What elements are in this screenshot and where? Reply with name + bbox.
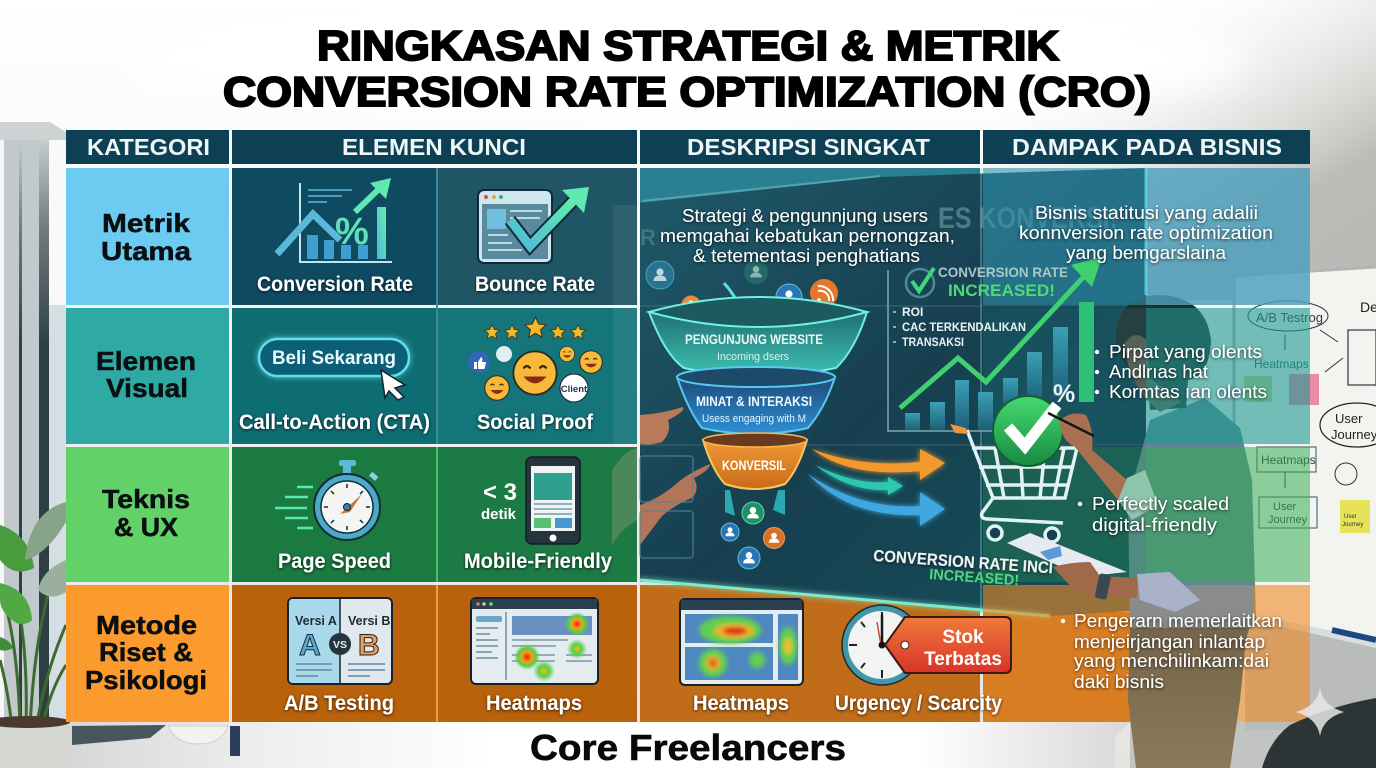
impact text row 3: digital-friendly bbox=[1092, 515, 1217, 535]
table header row: ELEMEN KUNCI bbox=[342, 134, 526, 160]
table header row: KATEGORI bbox=[87, 134, 210, 160]
funnel visitors icons bbox=[646, 260, 838, 316]
label: bounce rate: Bounce Rate bbox=[475, 273, 595, 296]
impact text row 2: Kormtas ıan olents bbox=[1109, 382, 1267, 402]
impact text row 4: daki bisnis bbox=[1074, 672, 1164, 692]
label: heatmaps second: Heatmaps bbox=[693, 692, 789, 715]
funnel: stage 2: Usess engaging with M bbox=[702, 413, 806, 425]
label: social proof: Social Proof bbox=[477, 411, 594, 434]
row tints over impact column bbox=[983, 168, 1310, 722]
impact text row 4 bbox=[1061, 611, 1282, 692]
funnel: stage 2 bbox=[677, 367, 835, 434]
impact text row 4: menjeirjangan inlantap bbox=[1074, 632, 1265, 652]
footer brand: Core Freelancers bbox=[530, 727, 846, 768]
presenter lower body bbox=[1128, 585, 1254, 768]
whiteboard bbox=[1232, 267, 1376, 648]
whiteboard: User bbox=[1344, 514, 1357, 520]
presenter upper body bbox=[1116, 295, 1256, 625]
whiteboard: A/B Testrog bbox=[1256, 310, 1323, 325]
title: RINGKASAN STRATEGI & METRIK bbox=[317, 22, 1059, 69]
flow arrows bbox=[808, 449, 945, 526]
whiteboard: User bbox=[1273, 501, 1297, 513]
holographic screen: R bbox=[640, 225, 656, 250]
whiteboard: Journey bbox=[1268, 514, 1308, 526]
impact text row 4: yang menchilinkam:dai bbox=[1074, 651, 1269, 671]
impact text row 4: Pengerarn memerlaitkan bbox=[1074, 611, 1282, 631]
pointing hands bbox=[640, 407, 710, 558]
chart panel: CAC TERKENDALIKAN bbox=[902, 320, 1026, 334]
holographic screen: ES KONVERSI! bbox=[938, 202, 1118, 235]
white glow behind title bbox=[128, 0, 1248, 120]
conversion rate text on screen: INCREASED! bbox=[929, 566, 1020, 589]
icon: A/B test: Versi A bbox=[295, 614, 337, 628]
title: CONVERSION RATE OPTIMIZATION (CRO) bbox=[223, 68, 1151, 115]
icon: A/B test: VS bbox=[333, 639, 347, 651]
chair bbox=[1262, 698, 1376, 768]
icon: A/B test: B bbox=[358, 629, 380, 662]
description text: & tetementasi penghatians bbox=[693, 246, 920, 266]
table header row: DESKRIPSI SINGKAT bbox=[687, 134, 930, 160]
desk objects bbox=[72, 725, 240, 756]
icon: conversion rate bbox=[277, 178, 392, 262]
impact text row 1: yang bemgarslaina bbox=[1066, 243, 1227, 263]
funnel: stage 2: MINAT & INTERAKSI bbox=[696, 394, 812, 409]
key element cells bbox=[232, 168, 637, 722]
impact text row 2: Pirpat yang olents bbox=[1109, 342, 1262, 362]
category cells: Utama bbox=[101, 236, 192, 266]
plant and pot bbox=[0, 502, 70, 768]
impact text row 3 bbox=[1078, 494, 1229, 535]
funnel: stage 1 bbox=[649, 297, 867, 376]
icon: social proof: Client bbox=[561, 384, 588, 395]
description text bbox=[660, 206, 955, 266]
icon: phone with load time bbox=[481, 457, 580, 544]
label: mobile friendly: Mobile-Friendly bbox=[464, 550, 612, 573]
chart panel: CONVERSION RATE bbox=[938, 264, 1068, 280]
icon: clock with stock tag bbox=[842, 605, 1011, 685]
category cells: Visual bbox=[106, 373, 188, 403]
chart panel: TRANSAKSI bbox=[902, 335, 964, 349]
whiteboard: Heatmaps bbox=[1261, 453, 1316, 467]
holographic screen bbox=[640, 168, 1146, 616]
label: page speed: Page Speed bbox=[278, 550, 391, 573]
watermark sparkle bbox=[1296, 688, 1344, 736]
category cells: & UX bbox=[114, 512, 179, 542]
chart panel bbox=[888, 257, 1102, 431]
category cells bbox=[66, 168, 229, 722]
icon: CTA button bbox=[259, 339, 409, 400]
impact text row 2 bbox=[1095, 342, 1267, 402]
whiteboard: Journey bbox=[1342, 522, 1363, 528]
funnel: stage 1: PENGUNJUNG WEBSITE bbox=[685, 331, 823, 347]
table header row: DAMPAK PADA BISNIS bbox=[1012, 134, 1282, 160]
icon: social proof bbox=[468, 317, 602, 402]
icon: stopwatch bbox=[275, 460, 380, 540]
table header row bbox=[66, 130, 1310, 164]
description text: memgahai kebatukan pernongzan, bbox=[660, 226, 955, 246]
conversion rate text on screen: CONVERSION RATE INCI bbox=[873, 546, 1054, 578]
category cells: Elemen bbox=[96, 346, 196, 376]
whiteboard: User bbox=[1335, 411, 1363, 426]
shopping cart with check badge: % bbox=[1053, 380, 1075, 408]
category cells: Metrik bbox=[102, 208, 191, 238]
presenter arms, pen and tablet bbox=[1007, 413, 1200, 612]
icon: A/B test: Versi B bbox=[348, 614, 390, 628]
icon: heatmap page bbox=[471, 598, 598, 684]
icon: A/B test: A bbox=[299, 629, 321, 662]
whiteboard: Journey bbox=[1331, 427, 1376, 442]
funnel: stage 3 conversion: KONVERSIL bbox=[722, 457, 786, 473]
label: CTA: Call-to-Action (CTA) bbox=[239, 411, 430, 434]
icon: phone with load time: detik bbox=[481, 506, 517, 523]
label: conversion rate: Conversion Rate bbox=[257, 273, 413, 296]
icon: phone with load time: < 3 bbox=[483, 479, 517, 506]
funnel: stage 3 conversion bbox=[703, 433, 807, 516]
funnel: stage 1: Incoming dsers bbox=[717, 351, 789, 363]
icon: heatmap screen bbox=[680, 599, 803, 685]
shopping cart with check badge bbox=[950, 380, 1077, 542]
label: urgency: Urgency / Scarcity bbox=[835, 692, 1002, 715]
converted users bbox=[721, 502, 784, 569]
category cells: Teknis bbox=[102, 484, 190, 514]
description column cells bbox=[640, 168, 980, 722]
icon: clock with stock tag: Stok bbox=[942, 627, 984, 648]
icon: A/B test bbox=[288, 598, 392, 684]
icon: clock with stock tag: Terbatas bbox=[924, 649, 1002, 670]
impact text row 1: Bisnis statitusi yang adalii bbox=[1035, 203, 1258, 223]
impact text row 3: Perfectly scaled bbox=[1092, 494, 1229, 514]
category cells: Metode bbox=[96, 610, 197, 640]
impact text row 1: konnversion rate optimization bbox=[1019, 223, 1273, 243]
impact column orange base bbox=[983, 612, 1133, 722]
icon: conversion rate: % bbox=[335, 211, 369, 253]
whiteboard: Heatmaps bbox=[1254, 357, 1309, 371]
title bbox=[223, 22, 1151, 115]
category cells: Riset & bbox=[99, 637, 193, 667]
icon: CTA button: Beli Sekarang bbox=[272, 348, 396, 369]
description text: Strategi & pengunnjung users bbox=[682, 206, 928, 226]
icon: bounce rate bbox=[478, 187, 589, 263]
chart panel: ROI bbox=[902, 305, 923, 319]
impact text row 1 bbox=[1019, 203, 1273, 263]
category cells: Psikologi bbox=[85, 665, 207, 695]
conversion rate text on screen bbox=[873, 546, 1054, 589]
label: heatmaps: Heatmaps bbox=[486, 692, 582, 715]
label: A/B testing: A/B Testing bbox=[284, 692, 394, 715]
chart panel: INCREASED! bbox=[948, 281, 1055, 300]
impact text row 2: Andlrıas hat bbox=[1109, 362, 1208, 382]
